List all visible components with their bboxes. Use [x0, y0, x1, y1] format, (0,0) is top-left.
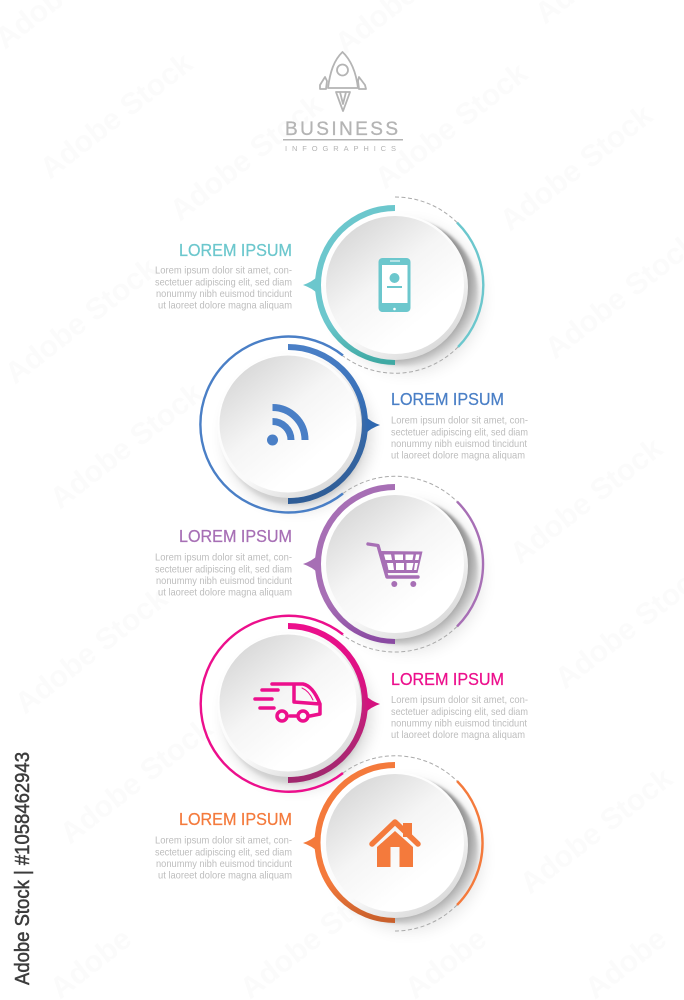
step 3: cart circle — [303, 476, 483, 652]
step 2 text: nonummy nibh euismod tincidunt — [391, 438, 527, 450]
icon: phone — [378, 258, 410, 312]
icon: home — [372, 822, 418, 867]
logo: rocket — [320, 52, 366, 111]
step 4: truck circle — [201, 616, 380, 792]
step 2 text: Lorem ipsum dolor sit amet, con- — [391, 414, 528, 426]
watermark pattern: Adobe Stock — [54, 711, 219, 851]
step 5 text: ut laoreet dolore magna aliquam — [158, 870, 292, 882]
watermark pattern: Adobe Stock — [514, 761, 679, 901]
thin arc — [457, 502, 483, 626]
step 2: signal circle — [200, 336, 380, 513]
icon: signal — [267, 408, 305, 446]
watermark pattern: Adobe Stock — [369, 56, 534, 196]
step 2 heading: LOREM IPSUM — [391, 389, 504, 409]
step 5 text: sectetuer adipiscing elit, sed diam — [155, 846, 292, 858]
thin arc — [457, 222, 483, 347]
pointer — [303, 276, 318, 294]
watermark pattern: Adobe Stock — [9, 581, 174, 721]
step 1 text: sectetuer adipiscing elit, sed diam — [155, 276, 292, 288]
step 4 heading: LOREM IPSUM — [391, 669, 504, 689]
step 3 text: ut laoreet dolore magna aliquam — [158, 586, 292, 598]
step 5 text: nonummy nibh euismod tincidunt — [156, 858, 292, 870]
pointer — [365, 416, 380, 434]
step 3 text: nonummy nibh euismod tincidunt — [156, 575, 292, 587]
step 5: home circle — [303, 756, 483, 931]
step 3 text: Lorem ipsum dolor sit amet, con- — [155, 552, 292, 564]
step 5 heading: LOREM IPSUM — [179, 809, 292, 829]
step 3 heading: LOREM IPSUM — [179, 526, 292, 546]
step 2 text: sectetuer adipiscing elit, sed diam — [391, 426, 528, 438]
step 3 text: sectetuer adipiscing elit, sed diam — [155, 564, 292, 576]
watermark pattern: Adobe Stock — [504, 431, 669, 571]
thick arc — [288, 626, 365, 780]
soft shadow — [226, 364, 370, 508]
step 1 text: ut laoreet dolore magna aliquam — [158, 300, 292, 312]
dashed arc — [343, 476, 457, 652]
thin arc — [201, 616, 343, 792]
thick arc — [318, 208, 395, 362]
step 2 text: ut laoreet dolore magna aliquam — [391, 450, 525, 462]
step 2 text — [391, 414, 528, 462]
logo divider line and subtitle — [283, 139, 403, 153]
disc — [218, 633, 362, 777]
step 1 text: nonummy nibh euismod tincidunt — [156, 288, 292, 300]
shadow — [332, 778, 482, 930]
pointer — [303, 834, 318, 852]
step 4 text: nonummy nibh euismod tincidunt — [391, 718, 527, 730]
shadow — [332, 499, 482, 651]
disc — [218, 354, 362, 498]
thin arc — [200, 336, 343, 513]
step 4 text: Lorem ipsum dolor sit amet, con- — [391, 694, 528, 706]
step 1 heading: LOREM IPSUM — [179, 240, 292, 260]
watermark pattern: Adobe Stock — [34, 46, 199, 186]
dashed arc — [343, 756, 457, 931]
logo title: BUSINESS: BUSINESS — [285, 119, 398, 140]
disc — [322, 493, 468, 639]
step 3 text — [155, 552, 292, 598]
watermark pattern: Adobe Stock — [44, 376, 209, 516]
icon: cart — [368, 544, 422, 587]
shadow — [332, 220, 482, 372]
thick arc — [318, 487, 395, 641]
disc — [322, 772, 468, 918]
thick arc — [318, 765, 395, 920]
step 1: phone circle — [303, 197, 483, 373]
pointer — [365, 695, 380, 713]
stock credit: Adobe Stock | #1058462943 — [12, 752, 34, 985]
step 4 text — [391, 694, 528, 741]
thin arc — [457, 781, 483, 905]
watermark pattern: Adobe Stock — [164, 88, 329, 228]
step 5 text — [155, 834, 292, 882]
disc — [322, 214, 468, 360]
dashed arc — [343, 197, 458, 373]
icon: truck — [255, 684, 320, 721]
watermark pattern: Adobe Stock — [494, 98, 659, 238]
soft shadow — [226, 643, 370, 787]
step 1 text — [155, 264, 292, 312]
logo divider line and subtitle: INFOGRAPHICS — [285, 144, 396, 153]
thick arc — [288, 347, 365, 501]
step 1 text: Lorem ipsum dolor sit amet, con- — [155, 264, 292, 276]
cast shadow — [222, 361, 366, 505]
pointer — [303, 555, 318, 573]
step 4 text: sectetuer adipiscing elit, sed diam — [391, 706, 528, 718]
step 4 text: ut laoreet dolore magna aliquam — [391, 729, 525, 741]
watermark pattern: Adobe Stock — [0, 251, 164, 391]
step 5 text: Lorem ipsum dolor sit amet, con- — [155, 834, 292, 846]
cast shadow — [222, 640, 366, 784]
